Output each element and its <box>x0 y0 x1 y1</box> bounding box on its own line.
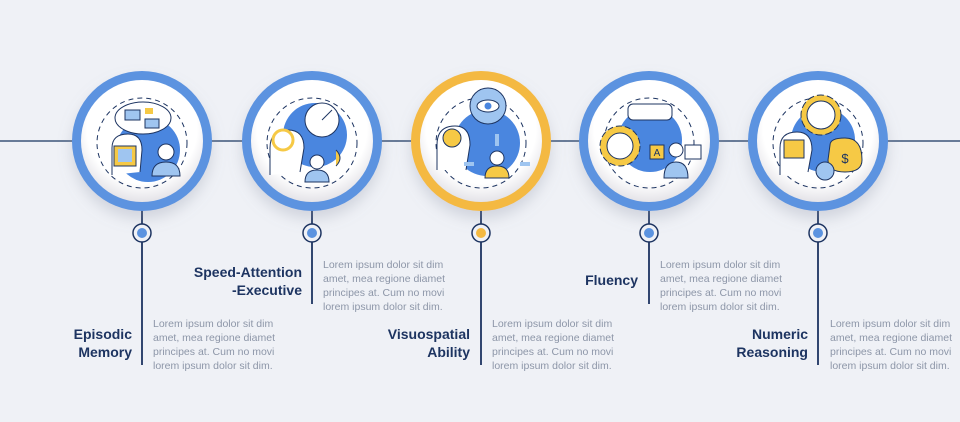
text: episodic description: amet, mea regione diamet <box>153 332 275 344</box>
title: Numeric Reasoning: Reasoning <box>736 344 808 360</box>
text: episodic description: lorem ipsum dolor sit dim. <box>153 360 273 372</box>
title: Episodic Memory: Memory <box>78 344 132 360</box>
icon: memory <box>97 98 187 188</box>
icon: stopwatch <box>267 98 357 188</box>
text: visuospatial description: amet, mea regione diamet <box>492 332 614 344</box>
text: speed description: principes at. Cum no movi <box>323 287 444 299</box>
icon: eye and gear <box>436 88 530 188</box>
text: episodic description: principes at. Cum no movi <box>153 346 274 358</box>
connector lines <box>142 210 818 365</box>
text: numeric description: lorem ipsum dolor sit dim. <box>830 360 950 372</box>
circle 5: numeric <box>748 71 888 211</box>
title: Speed-Attention-Executive: -Executive <box>232 282 302 298</box>
circle 3: visuospatial <box>411 71 551 211</box>
title: Numeric Reasoning: Numeric <box>752 326 808 342</box>
title: Speed-Attention-Executive: Speed-Attention <box>194 264 302 280</box>
text: fluency description: Lorem ipsum dolor sit dim <box>660 259 780 271</box>
title: Fluency: Fluency <box>585 272 638 288</box>
icon: language: A <box>654 148 661 159</box>
text: numeric description: Lorem ipsum dolor sit dim <box>830 318 950 330</box>
text: speed description: Lorem ipsum dolor sit dim <box>323 259 443 271</box>
text: fluency description: principes at. Cum no movi <box>660 287 781 299</box>
dots <box>133 224 827 242</box>
text: visuospatial description: lorem ipsum dolor sit dim. <box>492 360 612 372</box>
text: numeric description: amet, mea regione diamet <box>830 332 952 344</box>
text: fluency description: lorem ipsum dolor sit dim. <box>660 301 780 313</box>
icon: numbers: $ <box>841 151 849 166</box>
title: Visuospatial Ability: Ability <box>427 344 470 360</box>
text: visuospatial description: Lorem ipsum dolor sit dim <box>492 318 612 330</box>
text: speed description: amet, mea regione diamet <box>323 273 445 285</box>
circle 1: episodic memory <box>72 71 212 211</box>
title: Episodic Memory: Episodic <box>74 326 132 342</box>
text: fluency description: amet, mea regione diamet <box>660 273 782 285</box>
text: speed description: lorem ipsum dolor sit dim. <box>323 301 443 313</box>
text: visuospatial description: principes at. Cum no movi <box>492 346 613 358</box>
title: Visuospatial Ability: Visuospatial <box>388 326 470 342</box>
text: numeric description: principes at. Cum no movi <box>830 346 951 358</box>
text: episodic description: Lorem ipsum dolor sit dim <box>153 318 273 330</box>
circle 4: fluency <box>579 71 719 211</box>
circle 2: speed-attention <box>242 71 382 211</box>
